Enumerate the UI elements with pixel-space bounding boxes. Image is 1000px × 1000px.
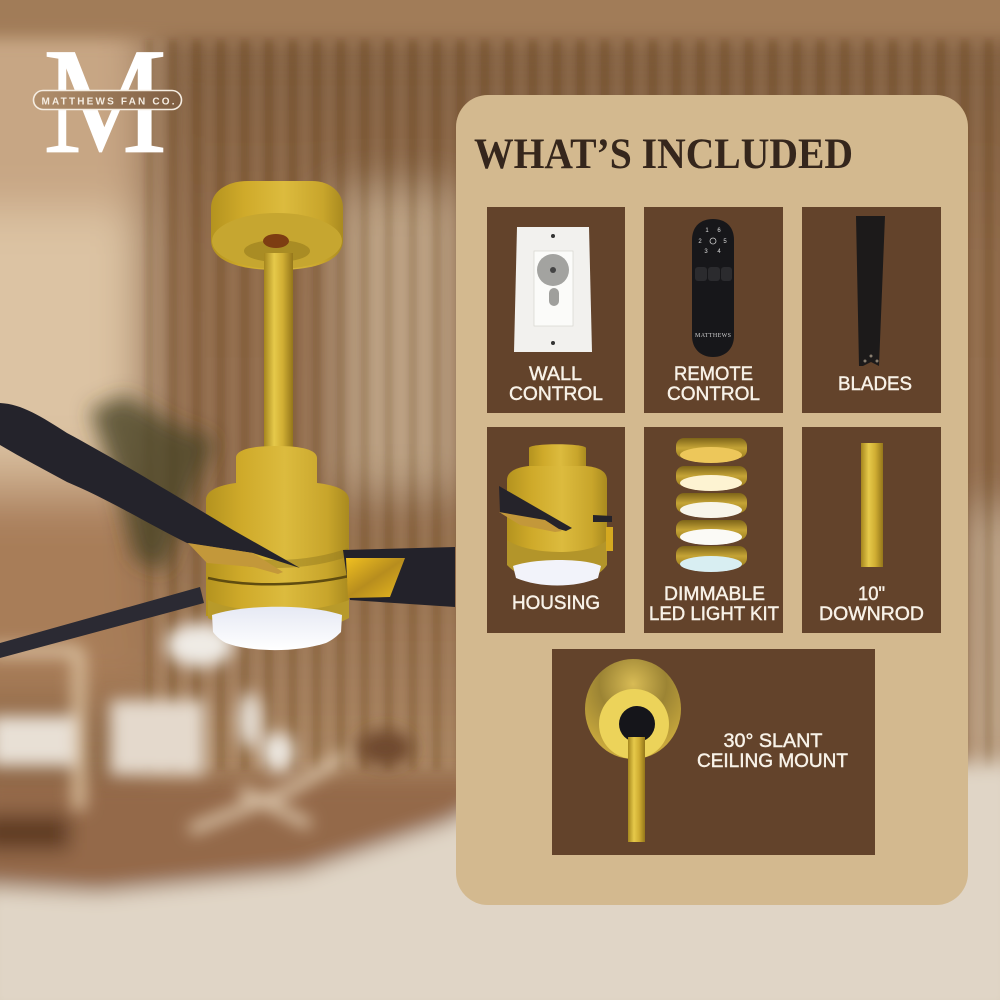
right blade (343, 547, 455, 607)
icon: remote control: 5 (723, 239, 727, 245)
motor housing (206, 446, 349, 631)
card: blades: BLADES (838, 373, 912, 395)
card: wall control: WALL (529, 363, 582, 385)
icon: blade (856, 216, 885, 366)
panel: what's included (456, 95, 968, 905)
icon: remote control: 6 (717, 228, 721, 234)
logo: Matthews Fan Co.: MATTHEWS FAN CO. (42, 96, 175, 108)
card: housing: HOUSING (512, 592, 600, 614)
card: slant ceiling mount: 30° SLANT (724, 730, 823, 752)
LED light (212, 607, 342, 650)
icon: housing (499, 444, 613, 586)
card: blades (802, 207, 941, 413)
heading: WHAT’S INCLUDED (474, 131, 853, 178)
blurred furniture (0, 623, 413, 830)
card: downrod: 10" (858, 583, 885, 605)
icon: remote control (692, 219, 734, 357)
card: wall control: CONTROL (509, 383, 603, 405)
card: remote control: REMOTE (674, 363, 753, 385)
icon: remote control: 1 (705, 228, 709, 234)
lower left blade (0, 587, 204, 658)
card: slant ceiling mount (552, 649, 875, 855)
card: LED light kit: DIMMABLE (664, 583, 765, 605)
card: housing (487, 427, 625, 633)
icon: slant mount (585, 659, 681, 842)
icon: remote control: 4 (717, 249, 721, 255)
icon: remote control: 3 (704, 249, 708, 255)
icon: remote control: MATTHEWS (695, 333, 731, 339)
card: LED light kit (644, 427, 783, 633)
card: LED light kit: LED LIGHT KIT (649, 603, 779, 625)
icon: remote control: 2 (698, 239, 702, 245)
logo: Matthews Fan Co.: M (43, 17, 167, 185)
icon: stacked LED rings (676, 438, 747, 572)
downrod (264, 253, 293, 448)
ceiling fan product photo (0, 181, 455, 658)
card: remote control (644, 207, 783, 413)
icon: downrod (861, 443, 883, 567)
card: remote control: CONTROL (667, 383, 760, 405)
icon: wall control (514, 227, 592, 352)
card: downrod (802, 427, 941, 633)
card: slant ceiling mount: CEILING MOUNT (697, 750, 848, 772)
floor and rug (0, 760, 1000, 1000)
upper left blade (0, 403, 300, 574)
ceiling mount canopy (211, 181, 343, 270)
card: downrod: DOWNROD (819, 603, 924, 625)
card: wall control (487, 207, 625, 413)
